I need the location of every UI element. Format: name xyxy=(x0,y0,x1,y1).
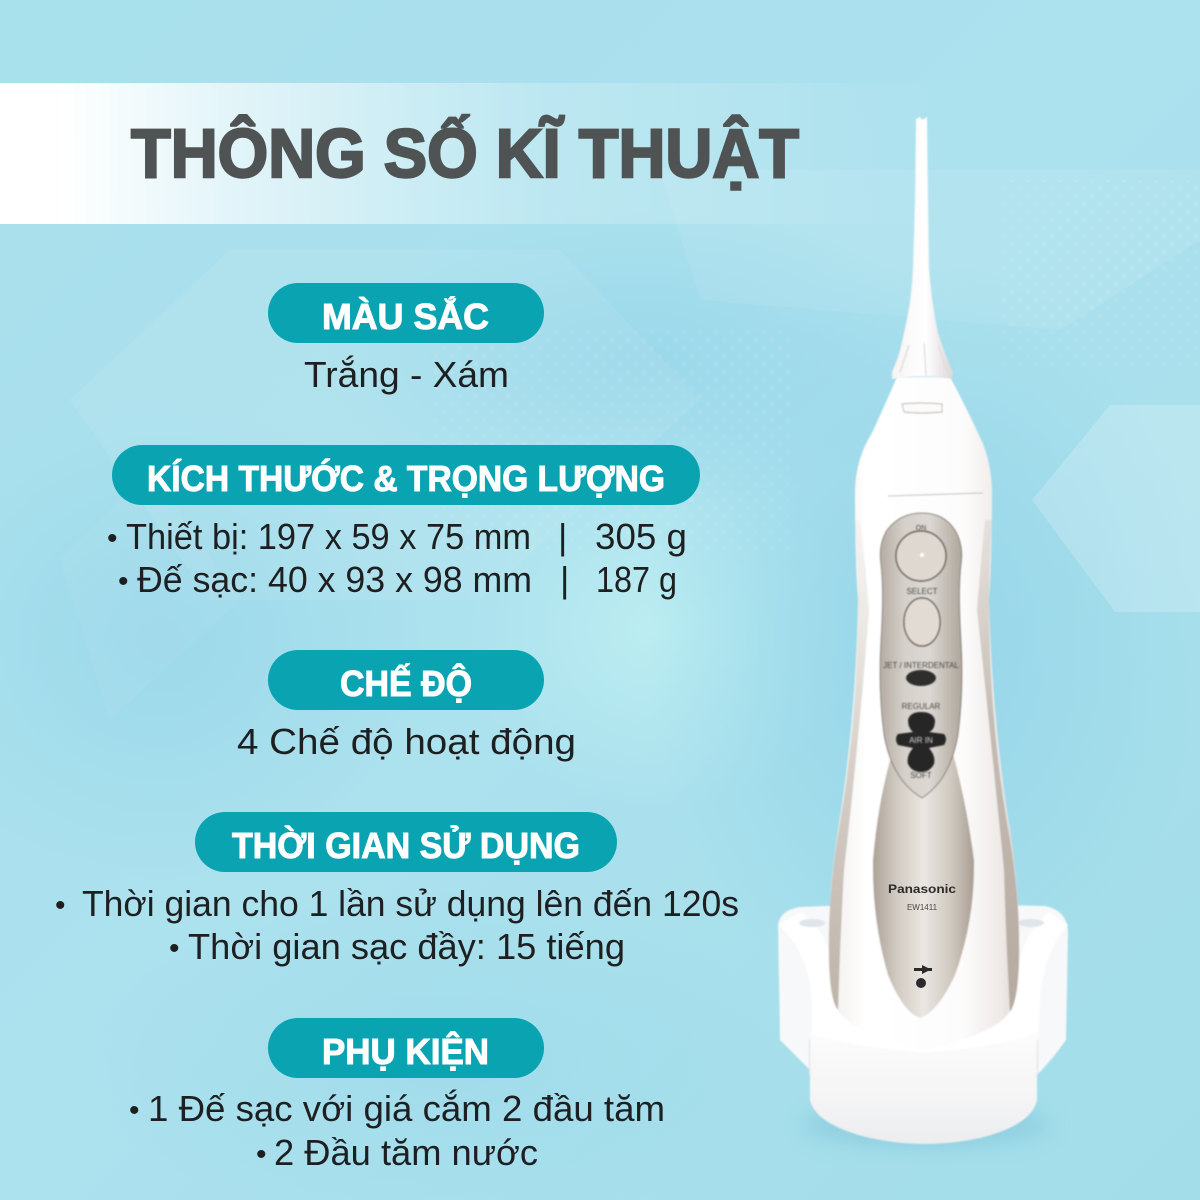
right trim strip xyxy=(977,520,1019,1012)
section: colour xyxy=(268,283,544,395)
usage duration: Thời gian cho 1 lần sử dụng lên đến 120s xyxy=(82,883,739,924)
charger size: • xyxy=(118,565,129,598)
charging base xyxy=(778,905,1068,1144)
device size: • xyxy=(107,522,118,555)
section: size and weight xyxy=(107,445,700,600)
charger size: | xyxy=(560,559,569,600)
pill heading: size and weight: KÍCH THƯỚC & TRỌNG LƯỢNG xyxy=(147,457,665,499)
button labels: AIR IN xyxy=(909,736,933,745)
device size: | xyxy=(558,516,567,557)
charge icon xyxy=(914,965,932,988)
button labels: SOFT xyxy=(910,771,932,780)
power button xyxy=(896,531,946,581)
handle body xyxy=(829,377,1019,1052)
brand label: Panasonic xyxy=(888,884,957,896)
jet button xyxy=(906,670,936,686)
device size: Thiết bị: 197 x 59 x 75 mm xyxy=(126,516,531,557)
select button xyxy=(904,598,940,646)
pill heading: colour xyxy=(268,283,544,343)
lower steel panel xyxy=(873,750,974,1018)
pill heading: accessories: PHỤ KIỆN xyxy=(322,1030,489,1072)
title: THÔNG SỐ KĨ THUẬT xyxy=(131,115,799,192)
pill heading: usage time: THỜI GIAN SỬ DỤNG xyxy=(232,824,580,866)
charge time: • xyxy=(169,932,180,965)
usage duration: • xyxy=(55,889,66,922)
left trim strip xyxy=(829,520,869,1010)
button labels xyxy=(883,525,959,780)
charger size: 187 g xyxy=(596,559,677,600)
accessory: charger: 1 Đế sạc với giá cắm 2 đầu tăm xyxy=(148,1088,665,1129)
base shadow xyxy=(800,1101,1050,1149)
pill heading: modes xyxy=(268,650,544,710)
pill heading: usage time xyxy=(195,812,617,872)
nozzle xyxy=(892,117,953,413)
seam xyxy=(888,493,983,496)
accessory: tips: 2 Đầu tăm nước xyxy=(274,1132,538,1173)
title band xyxy=(0,83,1200,224)
button labels: SELECT xyxy=(906,587,938,596)
colour value: Trắng - Xám xyxy=(304,354,509,395)
accessory: tips: • xyxy=(256,1138,267,1171)
section: modes xyxy=(237,650,576,762)
section: usage time xyxy=(55,812,739,967)
accessory: charger: • xyxy=(129,1094,140,1127)
button labels: JET / INTERDENTAL xyxy=(883,661,959,670)
modes value: 4 Chế độ hoạt động xyxy=(237,721,576,762)
pill heading: colour: MÀU SẮC xyxy=(322,295,489,337)
control panel xyxy=(880,513,962,798)
charger size: Đế sạc: 40 x 93 x 98 mm xyxy=(137,559,532,600)
charge time: Thời gian sạc đầy: 15 tiếng xyxy=(188,926,625,967)
pressure buttons xyxy=(896,712,946,772)
pill heading: size and weight xyxy=(112,445,700,505)
button labels: REGULAR xyxy=(902,702,941,711)
pill heading: modes: CHẾ ĐỘ xyxy=(340,662,472,704)
button labels: ON xyxy=(916,525,926,532)
model label: EW1411 xyxy=(907,903,938,912)
base front rim xyxy=(810,1000,1037,1052)
section: accessories xyxy=(129,1018,665,1173)
device size: 305 g xyxy=(595,516,687,557)
product: water flosser on charging base xyxy=(778,117,1068,1149)
pill heading: accessories xyxy=(268,1018,544,1078)
